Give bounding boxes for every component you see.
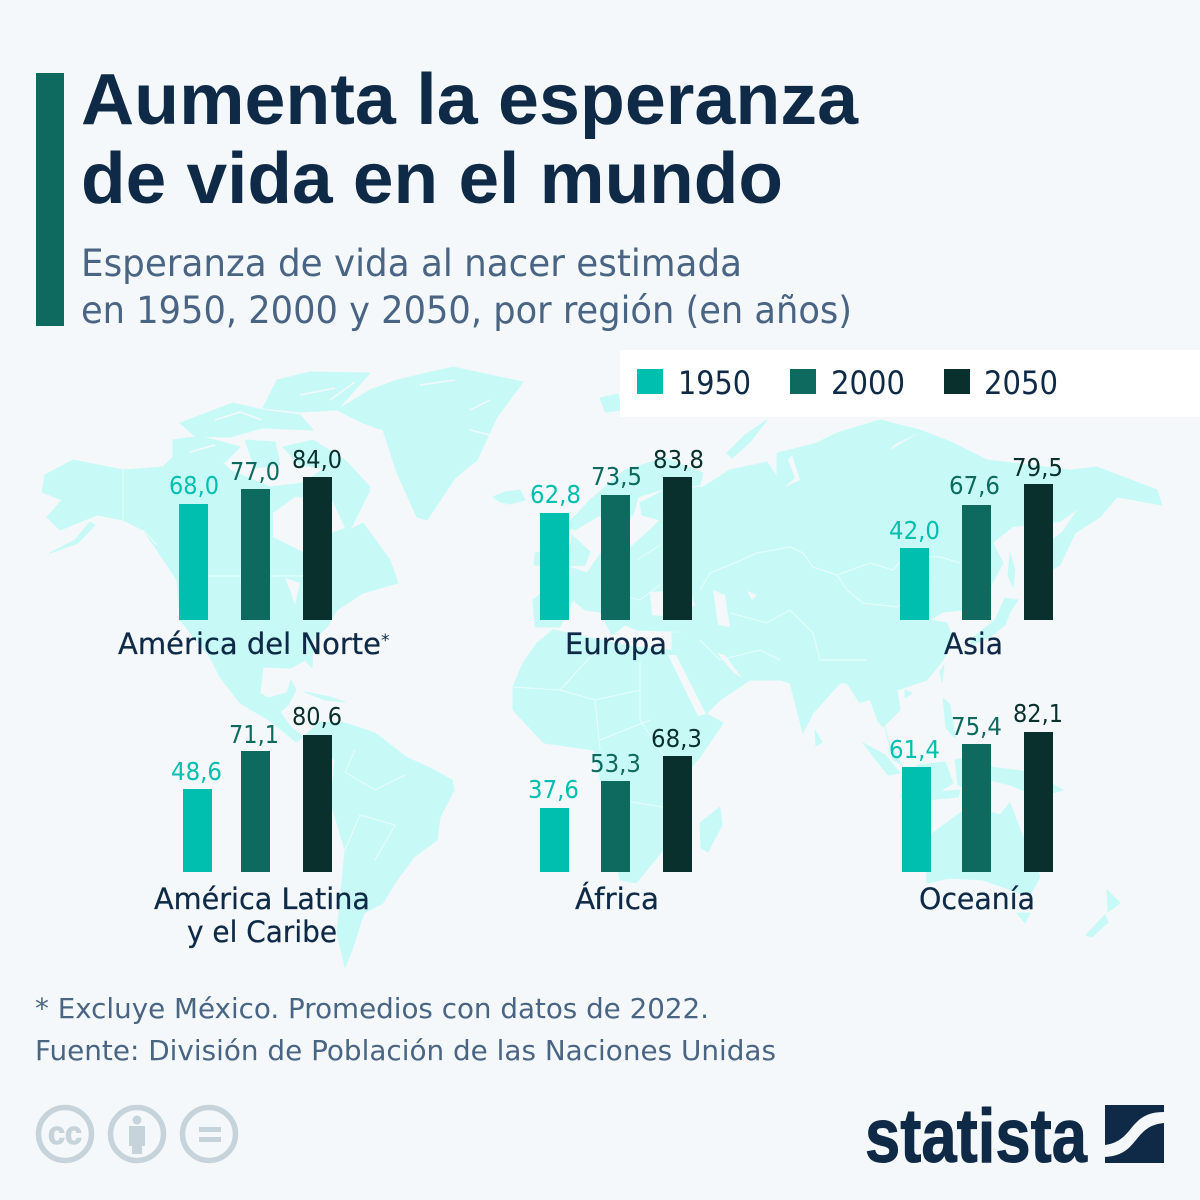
chart: Europa: 73,5 xyxy=(591,462,642,491)
chart: América del Norte: * xyxy=(381,631,390,651)
chart: Asia: Asia xyxy=(944,627,1003,661)
chart: América Latina y el Caribe: 80,6 xyxy=(292,702,342,731)
accent bar xyxy=(36,73,64,326)
legend: 1950 xyxy=(678,364,751,402)
map: Iceland xyxy=(493,490,525,504)
map: Caribbean islands xyxy=(305,692,345,702)
map: Eurasia xyxy=(533,420,1162,733)
chart: Oceanía: 61,4 xyxy=(889,735,940,764)
map: Australia xyxy=(925,803,1040,895)
title xyxy=(81,60,859,219)
chart: Oceanía: 82,1 xyxy=(1013,699,1063,728)
map: South America xyxy=(303,722,454,967)
world map background xyxy=(42,367,1162,967)
icon: creative commons licence: cc xyxy=(48,1115,82,1151)
map: Madagascar xyxy=(700,807,722,852)
map: Arctic islands xyxy=(173,372,370,493)
map: Greenland xyxy=(337,367,523,520)
subtitle: Esperanza de vida al nacer estimada xyxy=(81,242,742,285)
chart: América Latina y el Caribe: y el Caribe xyxy=(187,915,337,949)
map: Aleutians xyxy=(50,522,95,553)
map: Sakhalin xyxy=(1008,553,1015,587)
chart: América Latina y el Caribe xyxy=(154,702,370,949)
chart: África: África xyxy=(575,882,659,916)
legend: 2000 xyxy=(831,364,905,402)
map: Japan xyxy=(970,598,1018,645)
chart: América del Norte: 84,0 xyxy=(292,445,342,474)
chart: Asia: 67,6 xyxy=(949,471,1000,500)
subtitle xyxy=(81,242,852,332)
subtitle: en 1950, 2000 y 2050, por región (en años) xyxy=(81,289,852,332)
map: British Isles xyxy=(534,535,590,566)
chart: Oceanía: Oceanía xyxy=(919,882,1035,916)
map: Arctic channels xyxy=(190,380,490,490)
chart: Asia: 42,0 xyxy=(889,516,940,545)
footnote and source xyxy=(35,992,776,1067)
chart: América del Norte: 77,0 xyxy=(230,457,280,486)
legend xyxy=(620,350,1200,417)
icon: creative commons licence xyxy=(38,1108,236,1160)
map: Scandinavia xyxy=(565,458,703,540)
chart: África: 53,3 xyxy=(590,749,641,778)
chart: Oceanía: 75,4 xyxy=(951,712,1002,741)
map: North America xyxy=(42,457,398,742)
chart: África xyxy=(528,724,702,916)
chart: Oceanía xyxy=(889,699,1063,916)
map: borders xyxy=(123,470,960,860)
map: inland seas xyxy=(273,432,1077,720)
map: Africa xyxy=(513,630,723,883)
footnote and source: * Excluye México. Promedios con datos de 2022. xyxy=(35,992,709,1025)
chart: Asia: 79,5 xyxy=(1012,453,1063,482)
legend: 2050 xyxy=(984,364,1058,402)
chart: África: 68,3 xyxy=(651,724,702,753)
map: New Guinea xyxy=(990,767,1063,797)
footnote and source: Fuente: División de Población de las Naciones Unidas xyxy=(35,1034,776,1067)
title: de vida en el mundo xyxy=(81,139,783,219)
chart: América Latina y el Caribe: América Latina xyxy=(154,882,370,916)
chart: América del Norte: América del Norte xyxy=(118,627,381,661)
chart: Asia xyxy=(889,453,1063,661)
chart: América Latina y el Caribe: 71,1 xyxy=(229,720,279,749)
map: New Zealand xyxy=(1086,890,1120,937)
map: Tasmania xyxy=(1017,913,1030,923)
map: Novaya Zemlya and Svalbard xyxy=(600,394,767,458)
logo: statista: statista xyxy=(865,1094,1088,1179)
chart: América Latina y el Caribe: 48,6 xyxy=(171,757,222,786)
chart: Europa xyxy=(530,445,704,661)
map: Southeast Asia islands xyxy=(815,665,975,802)
chart: Europa: 62,8 xyxy=(530,480,581,509)
chart: América del Norte: 68,0 xyxy=(169,471,219,500)
title: Aumenta la esperanza xyxy=(81,60,859,140)
chart: África: 37,6 xyxy=(528,775,579,804)
chart: América del Norte xyxy=(118,445,390,661)
chart: Europa: 83,8 xyxy=(653,445,704,474)
chart: Europa: Europa xyxy=(565,627,667,661)
